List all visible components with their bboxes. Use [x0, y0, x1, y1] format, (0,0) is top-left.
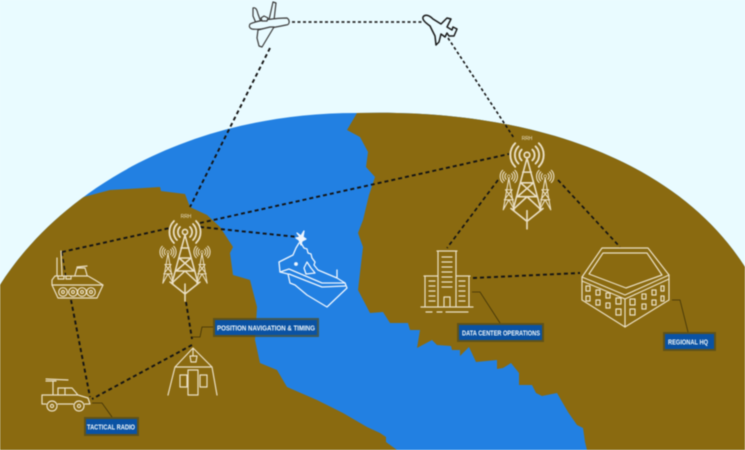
icon: armored vehicle [52, 251, 103, 298]
icon: gun truck [42, 379, 90, 411]
icon: surveillance drone [249, 2, 289, 47]
label: regional HQ [663, 300, 716, 351]
icon: field tent station [168, 348, 217, 395]
label: tactical radio [84, 403, 139, 436]
label: regional HQ: REGIONAL HQ [668, 337, 708, 346]
label: data center operations [457, 292, 544, 342]
icon: regional HQ building [582, 248, 669, 327]
RRH label: right: RRH [522, 136, 533, 142]
label: position navigation and timing [192, 318, 319, 337]
label: position navigation and timing: POSITION NAVIGATION & TIMING [217, 323, 315, 332]
icon: airplane [423, 15, 457, 45]
RRH label: left: RRH [181, 214, 192, 220]
icon: left RRH tower [160, 221, 210, 301]
dashed network links [62, 22, 620, 399]
landmass: left [0, 180, 397, 450]
landmass: right [347, 100, 745, 450]
globe: ocean [0, 113, 745, 450]
icon: right RRH tower [500, 143, 554, 229]
icon: data center building [421, 251, 473, 312]
label: tactical radio: TACTICAL RADIO [87, 422, 135, 431]
label: data center operations: DATA CENTER OPERATIONS [462, 328, 540, 337]
landmasses [0, 100, 745, 450]
icon: aircraft carrier [279, 231, 347, 307]
